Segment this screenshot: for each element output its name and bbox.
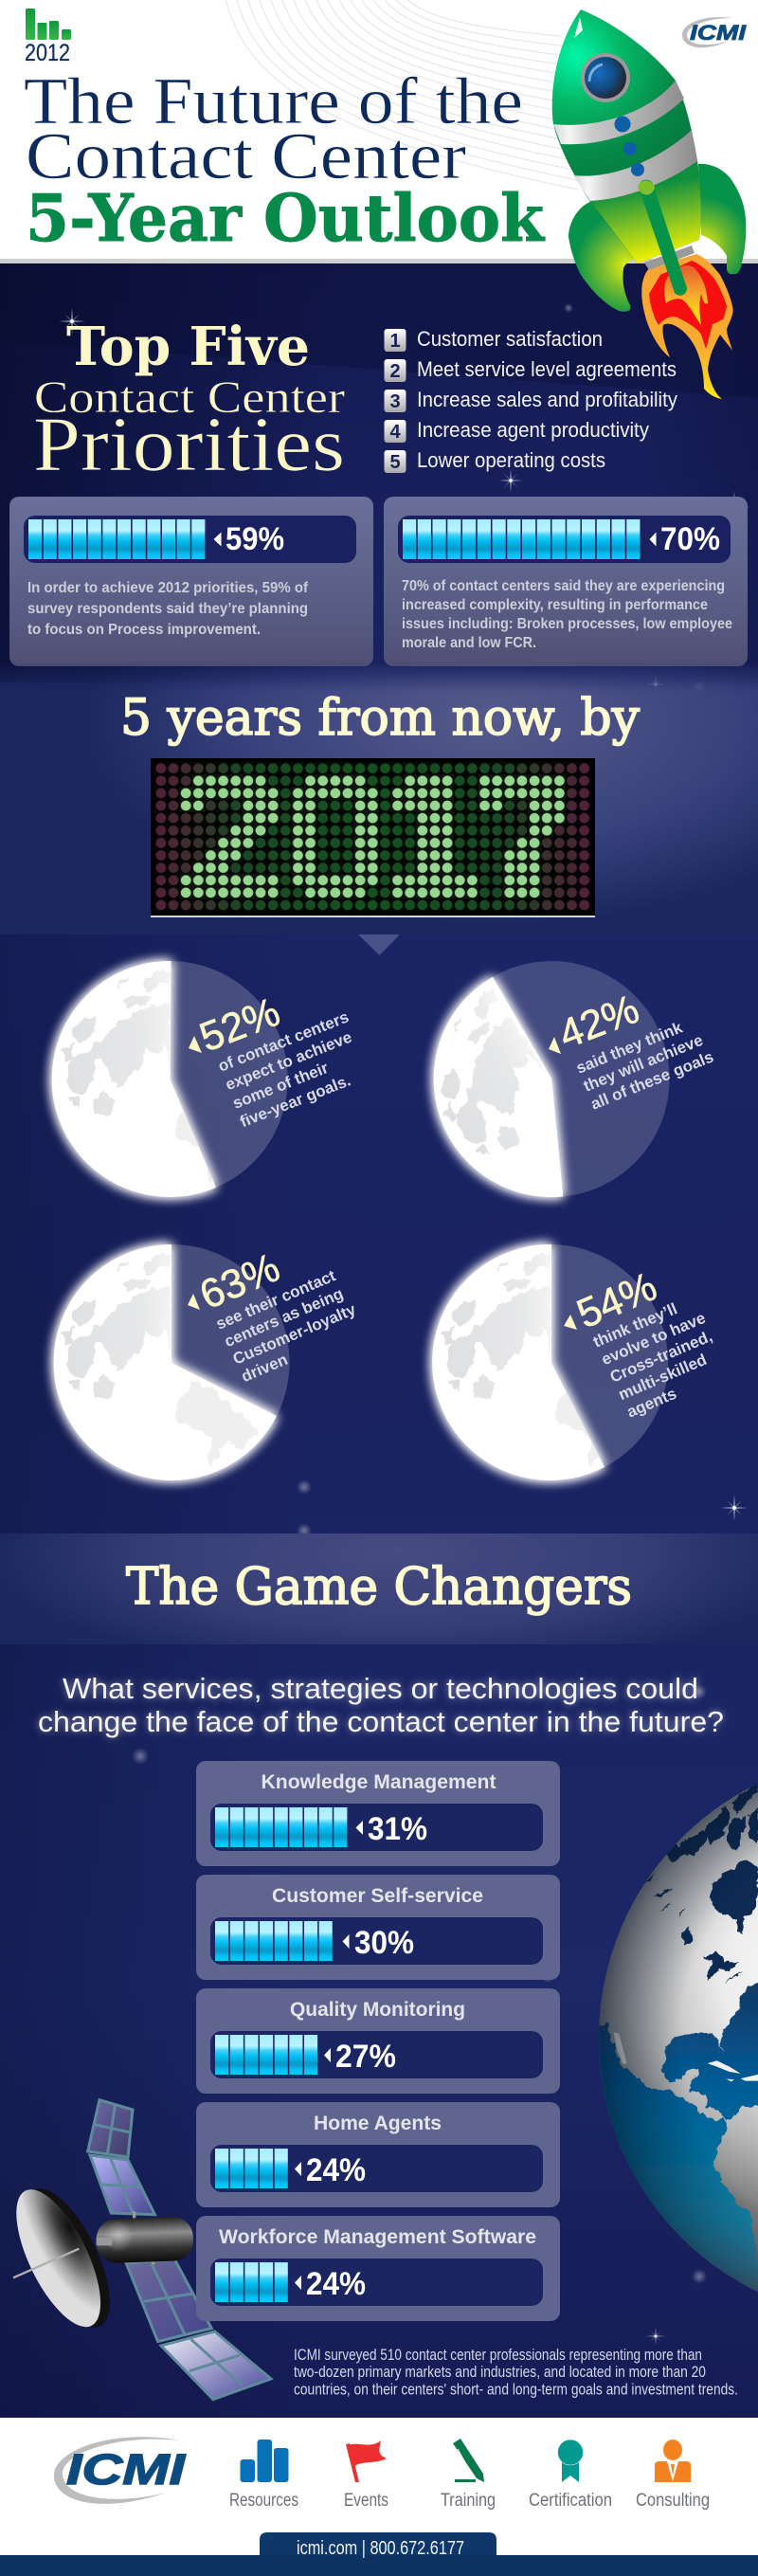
icon: green bar chart with 2012 — [25, 9, 71, 66]
footer ICMI logo — [54, 2437, 187, 2504]
pie chart: 54% moon: think they’ll — [590, 1299, 680, 1351]
numbered list: top five priorities: Meet service level agreements — [417, 357, 677, 381]
bar panel: Knowledge Management 31% — [196, 1761, 560, 1866]
heading: 5 years from now, by: 5 years from now, by — [120, 690, 641, 747]
arrow marker 54% — [564, 1315, 577, 1330]
pie chart: 52% moon — [52, 961, 373, 1197]
heading: The Game Changers: The Game Changers — [126, 1558, 632, 1616]
numbered list: top five priorities: 4 — [389, 422, 401, 443]
icon: green bar chart with 2012: 2012 — [25, 40, 70, 66]
globe illustration — [599, 1784, 758, 2292]
bar panel: Home Agents 24%: 24% — [306, 2152, 366, 2188]
bar panel: Customer Self-service 30%: Customer Self-service — [272, 1885, 483, 1907]
bar panel: Quality Monitoring 27%: Quality Monitoring — [290, 1999, 465, 2021]
pie chart: 52% moon: five-year goals. — [238, 1071, 353, 1131]
icon: Training — [441, 2439, 496, 2511]
pie chart: 54% moon — [432, 1244, 731, 1480]
heading: Top Five Contact Center Priorities: Contact Center — [34, 372, 345, 423]
question text — [38, 1672, 724, 1738]
arrow marker 52% — [189, 1036, 202, 1053]
icon: Training: Training — [441, 2491, 496, 2511]
atlantic ocean and gulf — [663, 1981, 758, 2121]
bar panel: Knowledge Management 31%: 31% — [368, 1811, 427, 1847]
panel: 70% increased complexity: increased complexity, resulting in performance — [402, 597, 708, 613]
satellite illustration — [0, 2100, 271, 2400]
pie chart: 42% moon: all of these goals — [588, 1047, 716, 1114]
title: 5-Year Outlook — [26, 181, 546, 257]
pie chart: 42% moon: they will achieve — [581, 1031, 706, 1096]
pie chart: 63% moon: Customer-loyalty — [230, 1300, 359, 1369]
panel: 70% increased complexity: issues including: Broken processes, low employee — [402, 616, 732, 632]
heading: Top Five Contact Center Priorities: Priorities — [33, 401, 345, 487]
sparkle stars — [59, 303, 750, 2346]
numbered list: top five priorities: 1 — [389, 331, 401, 352]
bar panel: Quality Monitoring 27%: 27% — [335, 2039, 396, 2075]
panel: 70% increased complexity: 70% — [660, 521, 720, 557]
arctic islands and bays — [644, 1783, 758, 1982]
panel: 59% process improvement: survey respondents said they’re planning — [27, 601, 308, 617]
numbered list: top five priorities: 3 — [389, 391, 401, 412]
icon: Certification: Certification — [529, 2491, 612, 2511]
bar panel: Customer Self-service 30% — [196, 1875, 560, 1980]
pie chart: 42% moon — [423, 961, 713, 1207]
pie chart: 42% moon: said they think — [573, 1018, 685, 1078]
rocket illustration — [552, 9, 746, 399]
title: The Future of the — [24, 65, 523, 138]
numbered list: top five priorities: Increase sales and profitability — [417, 388, 677, 411]
heading: Top Five Contact Center Priorities — [33, 316, 345, 487]
arrow marker 63% — [188, 1294, 200, 1310]
panel: 70% increased complexity: 70% of contact centers said they are experiencing — [402, 578, 725, 594]
numbered list: top five priorities: Lower operating costs — [417, 448, 605, 472]
panel: 70% increased complexity: morale and low FCR. — [402, 635, 536, 651]
pie chart: 52% moon: some of their — [230, 1059, 332, 1113]
footer panel — [0, 2418, 758, 2576]
panel: Game Changers band — [0, 1533, 758, 1644]
pie chart: 63% moon: centers as being — [222, 1284, 346, 1351]
numbered list: top five priorities — [385, 327, 677, 473]
icon: Certification — [529, 2440, 612, 2511]
panel: 59% process improvement: to focus on Process improvement. — [27, 622, 261, 638]
bar panel: Quality Monitoring 27% — [196, 1988, 560, 2094]
bar panel: Knowledge Management 31%: Knowledge Management — [262, 1771, 496, 1793]
footer contact tab: icmi.com | 800.672.6177 — [297, 2538, 464, 2559]
question text: change the face of the contact center in the future? — [38, 1705, 724, 1738]
pie chart: 42% moon: 42% — [552, 987, 645, 1058]
icon: Events: Events — [344, 2491, 388, 2511]
panel: 5 years from now band with pointer — [0, 662, 758, 955]
icon: Consulting: Consulting — [636, 2491, 710, 2511]
bar panel: Home Agents 24% — [196, 2102, 560, 2207]
pacific ocean — [587, 2021, 758, 2300]
numbered list: top five priorities: Increase agent productivity — [417, 418, 649, 442]
bar panel: Workforce Management Software 24%: Workforce Management Software — [219, 2226, 536, 2248]
pie chart: 63% moon — [54, 1244, 367, 1480]
pie chart: 63% moon: 63% — [193, 1244, 286, 1318]
pie chart: 52% moon: of contact centers — [216, 1007, 352, 1076]
icon: ICMI logo, header — [682, 17, 747, 47]
pie chart: 63% moon: driven — [239, 1351, 290, 1386]
icon: Resources — [229, 2440, 298, 2511]
pie chart: 54% moon: agents — [624, 1385, 679, 1422]
bar panel: Customer Self-service 30%: 30% — [354, 1925, 414, 1961]
bar panel: Home Agents 24%: Home Agents — [314, 2113, 442, 2134]
numbered list: top five priorities: Customer satisfaction — [417, 327, 603, 351]
LED display: 2017 — [151, 758, 595, 917]
footer ICMI logo: ICMI — [66, 2445, 187, 2494]
bar panel: Workforce Management Software 24%: 24% — [306, 2266, 366, 2302]
pie chart: 52% moon: expect to achieve — [223, 1028, 354, 1094]
bar panel: Workforce Management Software 24% — [196, 2216, 560, 2321]
pie chart: 54% moon: 54% — [570, 1263, 663, 1337]
panel: 59% process improvement: 59% — [226, 521, 284, 557]
pie chart: 54% moon: multi-skilled — [616, 1351, 710, 1404]
arrow marker 42% — [549, 1037, 561, 1054]
icon: Events — [344, 2440, 388, 2511]
pie chart: 52% moon: 52% — [193, 989, 286, 1061]
baja and caribbean islands — [614, 2032, 627, 2064]
footer contact tab — [260, 2532, 496, 2559]
title — [24, 65, 546, 257]
pie chart: 54% moon: evolve to have — [599, 1309, 708, 1369]
question text: What services, strategies or technologies could — [63, 1672, 698, 1705]
pie chart: 54% moon: Cross-trained, — [607, 1327, 715, 1387]
heading: Top Five Contact Center Priorities: Top Five — [66, 316, 310, 378]
icon: Consulting — [636, 2440, 710, 2511]
panel: 59% process improvement — [9, 497, 373, 666]
icon: Resources: Resources — [229, 2491, 298, 2511]
header white panel — [0, 0, 758, 263]
title: Contact Center — [26, 120, 466, 193]
icon: ICMI logo, header: ICMI — [690, 21, 747, 45]
numbered list: top five priorities: 2 — [389, 361, 401, 382]
pie chart: 63% moon: see their contact — [213, 1266, 338, 1333]
panel: 59% process improvement: In order to achieve 2012 priorities, 59% of — [27, 580, 309, 596]
panel: 70% increased complexity — [384, 497, 748, 666]
numbered list: top five priorities: 5 — [389, 452, 401, 473]
